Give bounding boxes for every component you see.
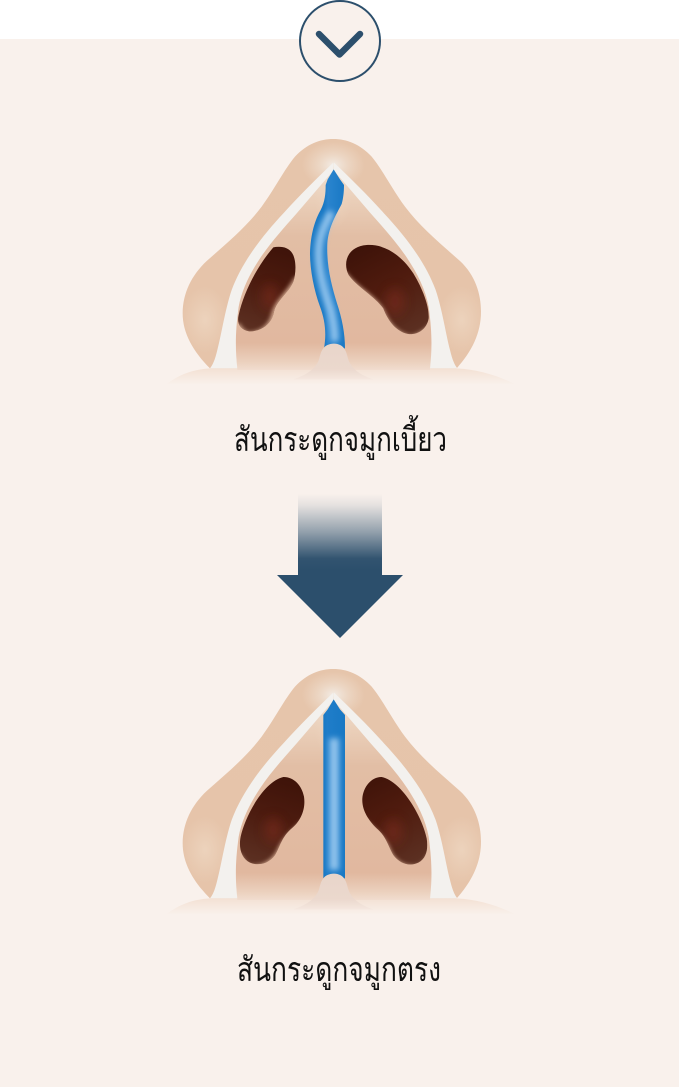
illustration: nose with deviated septum (167, 139, 515, 384)
columella (293, 344, 373, 379)
right nostril (362, 777, 428, 864)
left nostril (238, 246, 296, 332)
top white band (0, 0, 679, 39)
columella (293, 874, 373, 909)
label: straight septum: สันกระดูกจมูกตรง (237, 951, 441, 990)
label: deviated septum: สันกระดูกจมูกเบี้ยว (234, 415, 447, 460)
left nostril (240, 777, 304, 864)
deviated septum (310, 169, 345, 348)
icon: chevron down circle (300, 1, 380, 81)
arrow down (277, 494, 403, 638)
illustration: nose with straight septum (167, 669, 515, 914)
right nostril (346, 244, 429, 334)
straight septum (323, 699, 345, 878)
